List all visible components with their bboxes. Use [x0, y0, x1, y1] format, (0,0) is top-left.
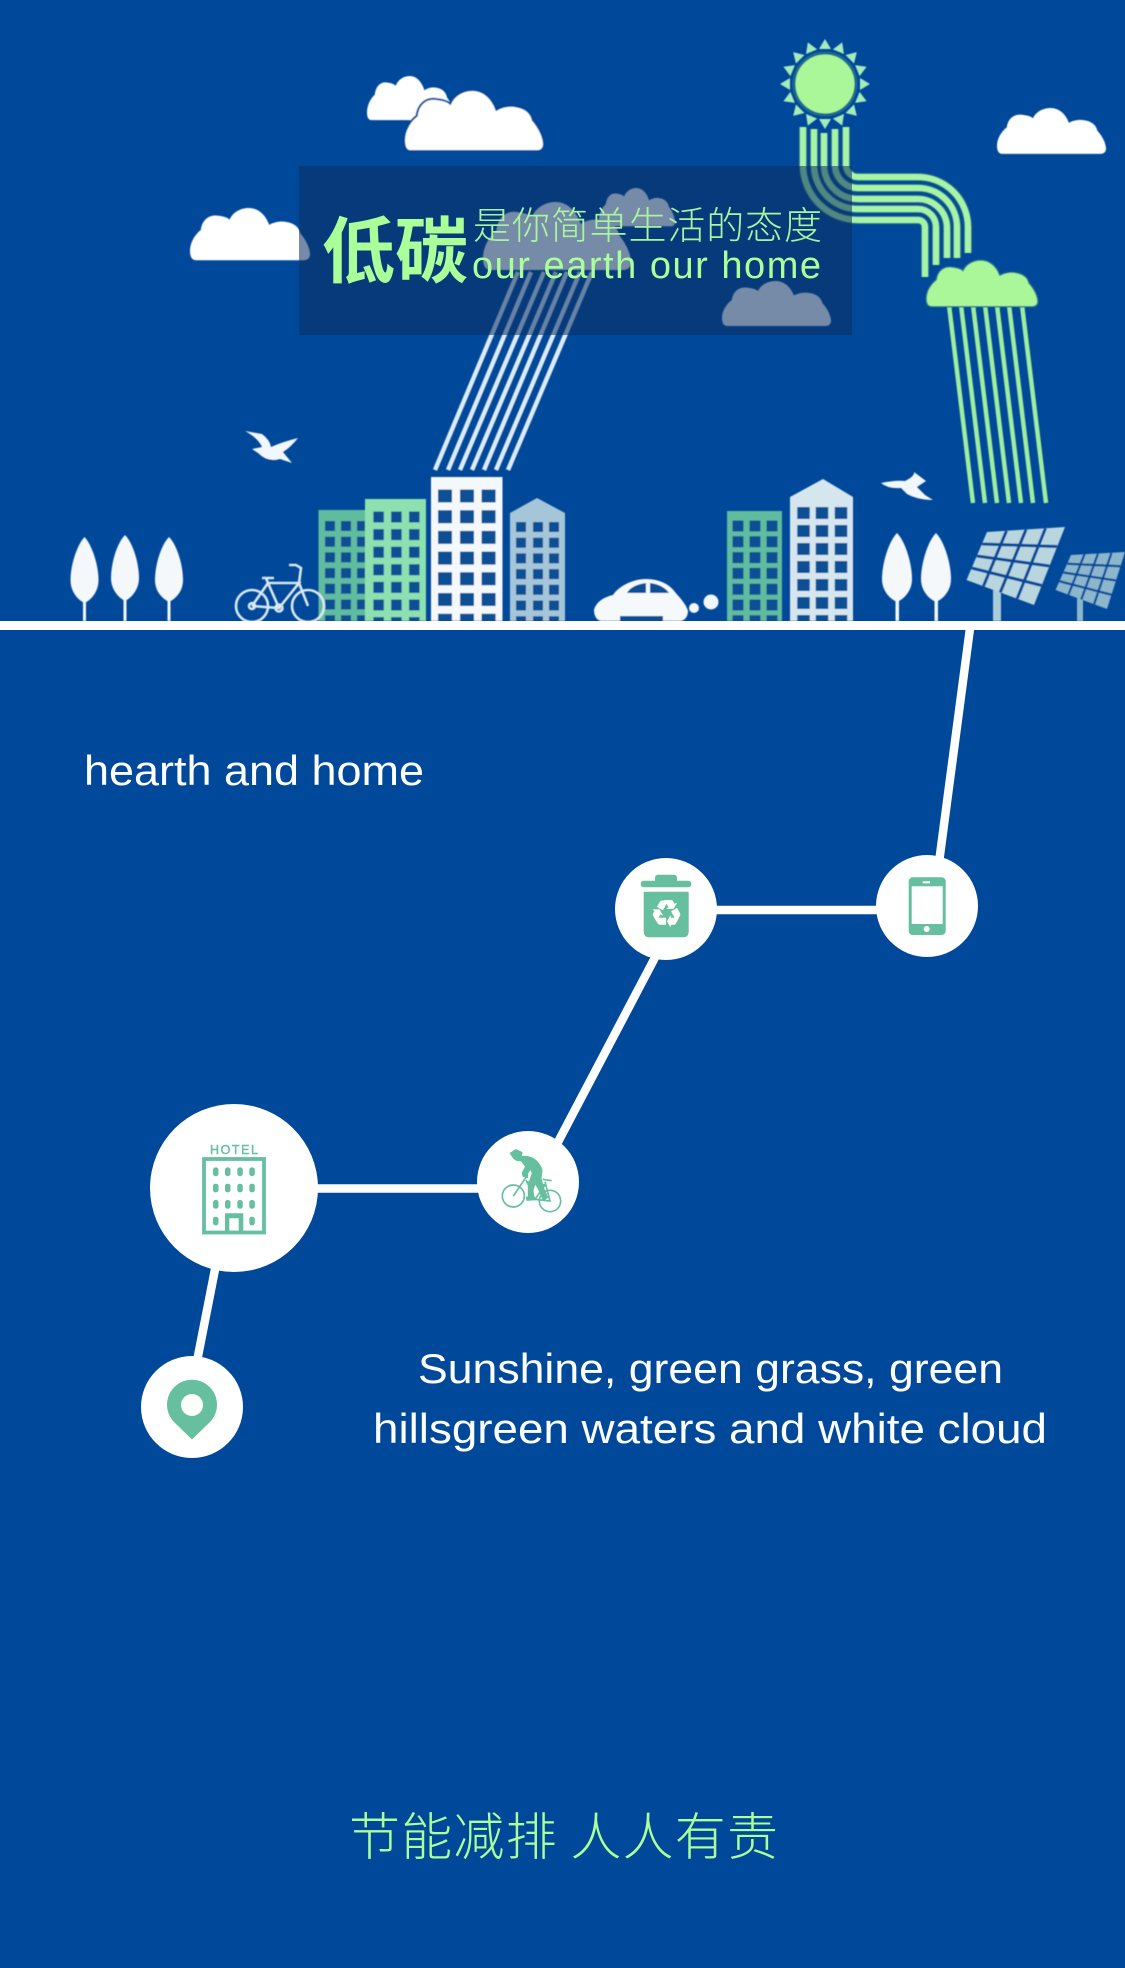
- bird: left: [245, 431, 298, 463]
- slogan: 节能减排 人人有责: [349, 1796, 778, 1870]
- building: teal left: [318, 510, 368, 621]
- illustration: low-carbon city scene: [70, 39, 1125, 622]
- trees: left group: [70, 535, 183, 621]
- white rain stripes: [435, 272, 592, 470]
- building: blue grey gabled: [510, 498, 565, 621]
- building: pale gabled: [790, 479, 853, 621]
- trees: right group: [882, 533, 951, 621]
- node: phone: [876, 855, 978, 957]
- subtitle: English: our earth our home: [472, 245, 821, 287]
- text: hearth and home: hearth and home: [84, 747, 424, 794]
- icon: hotel: HOTEL: [210, 1143, 258, 1157]
- icon: hotel: [204, 1143, 264, 1232]
- banner overlay: [299, 166, 852, 335]
- building: light green: [365, 499, 426, 621]
- building: teal right: [727, 511, 782, 621]
- bicycle: [236, 565, 324, 622]
- building: white tall: [431, 477, 502, 621]
- cloud: upper left pair: [367, 76, 544, 151]
- route line: [188, 626, 970, 1407]
- text: sunshine description: [373, 1345, 1047, 1452]
- green cloud: [926, 260, 1038, 307]
- text: sunshine description: hillsgreen waters and white cloud: [373, 1405, 1047, 1452]
- icon: phone: [909, 877, 946, 935]
- cloud: behind banner small: [599, 188, 675, 226]
- cloud: behind banner large: [483, 202, 631, 270]
- node: location pin: [141, 1356, 243, 1458]
- icon: recycle bin: ♻: [650, 892, 683, 936]
- cloud: upper right: [997, 108, 1106, 154]
- node: recycle bin: [615, 858, 717, 960]
- solar panel: small: [1056, 552, 1125, 621]
- sun energy pipes: [803, 127, 968, 277]
- text: sunshine description: Sunshine, green grass, green: [418, 1345, 1003, 1392]
- icon: location pin: [167, 1380, 217, 1440]
- cloud: banner lower right: [722, 281, 831, 326]
- node: cyclist: [477, 1131, 579, 1233]
- title: 低碳: 低碳: [322, 193, 468, 298]
- bird: right: [881, 472, 933, 500]
- solar panel: large: [966, 527, 1065, 621]
- car: [594, 579, 718, 621]
- node: hotel: [150, 1104, 318, 1272]
- icon: cyclist: [502, 1150, 561, 1212]
- subtitle: Chinese: 是你简单生活的态度: [473, 195, 822, 250]
- cloud: left of banner: [190, 208, 310, 260]
- sun: [780, 39, 870, 129]
- ground line: [0, 621, 1125, 630]
- green cloud rain stripes: [949, 305, 1046, 503]
